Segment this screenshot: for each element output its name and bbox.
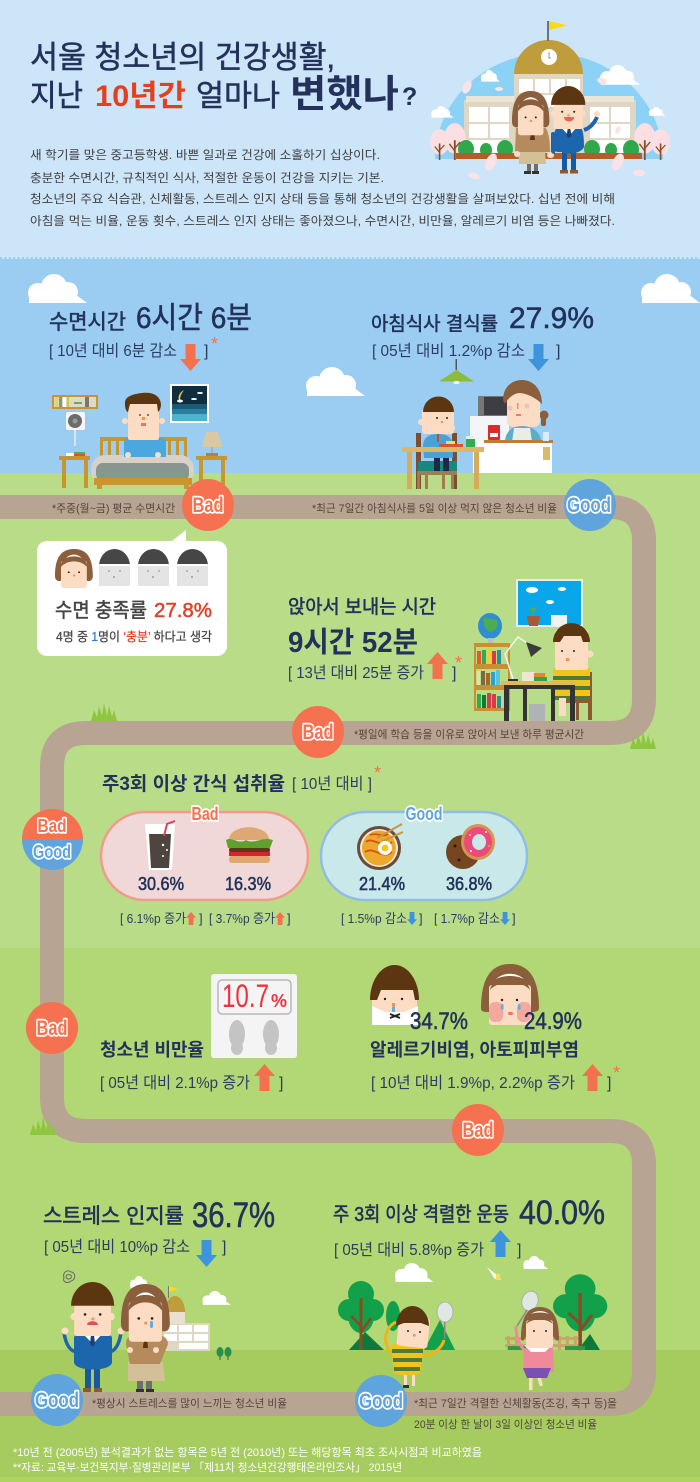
badge: good stress: [31, 1374, 83, 1426]
title: 10년간: [95, 80, 186, 113]
badge: good breakfast: [564, 479, 616, 531]
icon: cookie and donut: [446, 824, 495, 869]
road caption: exercise: 20분 이상 한 날이 3일 이상인 청소년 비율: [414, 1417, 597, 1431]
allergy heading: ]: [607, 1075, 611, 1092]
allergy faces and figures: 24.9%: [524, 1008, 582, 1035]
badge: bad and good split: [22, 809, 83, 870]
icon: soda: [145, 821, 175, 870]
badge: bad and good split: Bad: [38, 816, 66, 836]
panel: bad snacks: [101, 804, 308, 900]
illustration: study desk: [474, 579, 594, 721]
breakfast skipping heading: [ 05년 대비 1.2%p 감소: [372, 342, 525, 360]
sitting time heading: ]: [452, 665, 456, 682]
badge: bad sleep: [182, 479, 234, 531]
arrow: up bad: [582, 1064, 603, 1091]
icon: digital scale: [211, 974, 297, 1058]
badge: bad sitting: Bad: [302, 721, 334, 744]
sitting time heading: [ 13년 대비 25분 증가: [288, 664, 424, 682]
arrow: down bad: [180, 344, 201, 371]
face: girl with atopy: [481, 964, 539, 1025]
road caption: sleep: *주중(월~금) 평균 수면시간: [52, 502, 175, 515]
badge: bad sitting: [292, 706, 344, 758]
sleep time heading: ]: [204, 343, 208, 360]
snack change labels: ]: [287, 911, 291, 926]
arrow: down good: [528, 344, 549, 371]
obesity heading: 청소년 비만율: [100, 1040, 204, 1060]
callout: sleep sufficiency: [37, 530, 227, 656]
exercise heading: [ 05년 대비 5.8%p 증가: [334, 1241, 484, 1259]
badge: good exercise: Good: [359, 1390, 403, 1413]
snack change labels: ]: [419, 911, 423, 926]
arrow: up bad: [254, 1064, 275, 1091]
stress heading: 스트레스 인지률: [43, 1205, 184, 1228]
icon: noodle bowl: [357, 824, 403, 870]
badge: good stress: Good: [35, 1389, 79, 1412]
sitting time heading: *: [455, 653, 462, 673]
exercise heading: [333, 1194, 605, 1259]
snack change labels: ]: [199, 911, 203, 926]
exercise heading: 주 3회 이상 격렬한 운동: [333, 1203, 509, 1226]
intro paragraph: 아침을 먹는 비율, 운동 횟수, 스트레스 인지 상태는 좋아졌으나, 수면시간, 비만율, 알레르기 비염 등은 나빠졌다.: [30, 214, 615, 228]
footnotes: **자료: 교육부·보건복지부·질병관리본부 「제11차 청소년건강행태온라인조사」 2015년: [13, 1461, 402, 1474]
snack heading: *: [374, 763, 381, 783]
snack change labels: [ 1.5%p 감소: [341, 911, 407, 926]
stress heading: ]: [222, 1239, 226, 1256]
exercise heading: 40.0%: [519, 1194, 605, 1232]
badge: bad allergy: Bad: [462, 1119, 494, 1142]
road: [0, 507, 644, 1404]
panel: good snacks: [321, 804, 527, 900]
footnotes: *10년 전 (2005년) 분석결과가 없는 항목은 5년 전 (2010년) 또는 해당항목 최초 조사시점과 비교하였음: [13, 1445, 482, 1459]
breakfast skipping heading: 27.9%: [509, 302, 594, 335]
title: 지난: [30, 80, 83, 113]
callout: sleep sufficiency: 4명 중 1명이 ‘충분’ 하다고 생각: [56, 630, 212, 644]
exercise heading: ]: [517, 1242, 521, 1259]
obesity heading: [100, 1040, 283, 1092]
illustration: stressed students with school: [62, 1271, 232, 1392]
panel: good snacks: 36.8%: [446, 874, 492, 894]
road caption: breakfast: *최근 7일간 아침식사를 5일 이상 먹지 않은 청소년 비율: [312, 501, 557, 515]
intro paragraph: 청소년의 주요 식습관, 신체활동, 스트레스 인지 상태 등을 통해 청소년의 건강생활을 살펴보았다. 십년 전에 비해: [30, 192, 615, 206]
allergy heading: [ 10년 대비 1.9%p, 2.2%p 증가: [371, 1074, 575, 1092]
arrow: down good: [196, 1240, 217, 1267]
panel: bad snacks: 30.6%: [138, 874, 184, 894]
badge: bad allergy: [452, 1104, 504, 1156]
badge: good exercise: [355, 1375, 407, 1427]
title: [30, 40, 417, 116]
callout: sleep sufficiency: 수면 충족률: [55, 599, 147, 622]
stress heading: [ 05년 대비 10%p 감소: [44, 1238, 190, 1256]
road caption: stress: *평상시 스트레스를 많이 느끼는 청소년 비율: [92, 1397, 287, 1410]
badge: bad obesity: Bad: [36, 1017, 68, 1040]
obesity heading: [ 05년 대비 2.1%p 증가: [100, 1074, 250, 1092]
illustration: school with two students: [430, 21, 670, 181]
sleep time heading: *: [211, 334, 218, 354]
sitting time heading: [288, 596, 462, 682]
callout: sleep sufficiency: 27.8%: [154, 600, 212, 622]
badge: good breakfast: Good: [567, 494, 611, 517]
snack change labels: ]: [512, 911, 516, 926]
road caption: exercise: [414, 1396, 617, 1431]
panel: good snacks: 21.4%: [359, 874, 405, 894]
snack change labels: [ 3.7%p 증가: [209, 911, 275, 926]
breakfast skipping heading: [371, 302, 594, 371]
sitting time heading: 앉아서 보내는 시간: [288, 596, 436, 618]
boy student: [547, 86, 600, 174]
grass tufts and clouds: [28, 274, 700, 1135]
panel: good snacks: Good: [406, 804, 442, 824]
stress heading: 36.7%: [192, 1196, 275, 1235]
badge: bad sleep: Bad: [192, 494, 224, 517]
road caption: exercise: *최근 7일간 격렬한 신체활동(조깅, 축구 등)을: [414, 1396, 617, 1410]
snack heading: [102, 763, 381, 795]
figure: girl playing badminton: [516, 1289, 559, 1390]
breakfast skipping heading: 아침식사 결식률: [371, 313, 498, 335]
sleep time heading: [ 10년 대비 6분 감소: [49, 342, 177, 360]
stress heading: [43, 1196, 275, 1267]
panel: bad snacks: Bad: [192, 804, 218, 824]
illustration: badminton in the park: [338, 1256, 607, 1390]
footnotes: [13, 1445, 482, 1474]
allergy faces and figures: [370, 964, 582, 1035]
icon: digital scale: %: [271, 991, 287, 1011]
allergy faces and figures: 34.7%: [410, 1008, 468, 1035]
arrow: up bad: [427, 652, 448, 679]
snack change labels: [ 1.7%p 감소: [434, 911, 500, 926]
icon: burger: [226, 827, 273, 863]
girl student: [512, 91, 554, 174]
illustration: bedroom: [52, 384, 227, 489]
illustration: kitchen breakfast: [402, 359, 553, 489]
allergy heading: [370, 1040, 620, 1092]
snack heading: [ 10년 대비 ]: [292, 775, 372, 793]
sleep time heading: 수면시간: [49, 311, 126, 334]
intro paragraph: 충분한 수면시간, 규칙적인 식사, 적절한 운동이 건강을 지키는 기본.: [30, 171, 384, 185]
snack change labels: [120, 911, 516, 926]
sitting time heading: 9시간 52분: [288, 626, 418, 659]
figure: boy playing badminton: [386, 1302, 453, 1388]
arrow: up good: [490, 1230, 511, 1257]
obesity heading: ]: [279, 1075, 283, 1092]
intro paragraph: 새 학기를 맞은 중고등학생. 바쁜 일과로 건강에 소홀하기 십상이다.: [30, 148, 380, 162]
sleep time heading: [49, 302, 252, 371]
allergy heading: 알레르기비염, 아토피피부염: [370, 1040, 579, 1060]
title: 얼마나: [196, 80, 280, 113]
icon: digital scale: 10.7: [222, 978, 269, 1014]
badge: bad and good split: Good: [33, 842, 71, 862]
breakfast skipping heading: ]: [556, 343, 560, 360]
snack heading: 주3회 이상 간식 섭취율: [102, 773, 285, 795]
title: 변했나: [290, 74, 399, 116]
snack change labels: [ 6.1%p 증가: [120, 911, 186, 926]
figure: angry boy: [62, 1282, 124, 1392]
road caption: sitting: *평일에 학습 등을 이유로 앉아서 보낸 하루 평균시간: [354, 727, 584, 741]
face: boy with rhinitis: [370, 965, 419, 1025]
intro paragraph: [30, 148, 615, 228]
allergy heading: *: [613, 1063, 620, 1083]
badge: bad obesity: [26, 1002, 78, 1054]
figure: tearful girl: [121, 1284, 170, 1392]
title: ?: [402, 83, 417, 111]
title: 서울 청소년의 건강생활,: [30, 40, 335, 75]
panel: bad snacks: 16.3%: [225, 874, 271, 894]
sleep time heading: 6시간 6분: [136, 302, 252, 335]
